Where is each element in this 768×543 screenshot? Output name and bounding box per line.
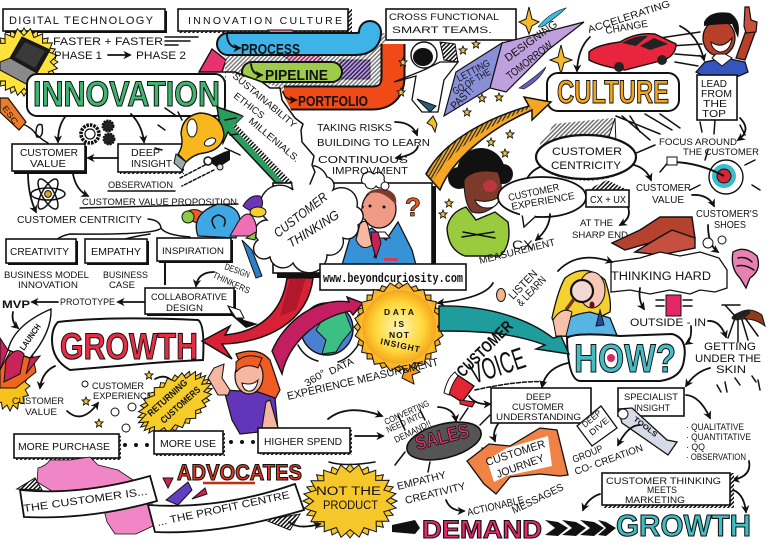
box: digital technology: DIGITAL TECHNOLOGY (9, 15, 154, 27)
text: 360 degree data: 360° (303, 368, 328, 390)
icon: mosquito (722, 305, 765, 342)
text: at the sharp end: SHARP END (572, 230, 628, 241)
ellipse: sales: SALES (413, 420, 472, 455)
text: accelerating change: ACCELERATING (587, 0, 672, 36)
text: design thinkers: THINKERS (211, 270, 252, 296)
box: website url (320, 264, 466, 290)
text: customer centricity (17, 214, 190, 241)
box: higher spend: HIGHER SPEND (264, 436, 342, 448)
text: taking risks, building to learn, continuous improvment: TAKING RISKS (317, 123, 392, 134)
box: more use: MORE USE (160, 438, 216, 450)
box: lead from the top: THE (703, 99, 727, 110)
text: business model innovation: INNOVATION (18, 280, 78, 291)
pipe decorations (199, 30, 385, 95)
box: customer value: CUSTOMER (20, 148, 78, 159)
text: focus around the customer: THE CUSTOMER (683, 147, 759, 158)
box: collaborative design (145, 288, 236, 316)
box: customer value: VALUE (30, 159, 66, 170)
icon: astronaut (394, 42, 458, 112)
text: at the sharp end (572, 207, 629, 241)
box: creativity (6, 239, 78, 265)
icon: launch rocket: LAUNCH (17, 322, 43, 352)
arrow: teal to how (439, 306, 569, 354)
heading: growth (red) (52, 318, 203, 370)
text: actionable messages: MESSAGES (510, 481, 566, 517)
card: deep dive (577, 406, 617, 446)
banner: letting go of the past, designing tomorrow: PAST! (449, 85, 476, 112)
diagram: process pipeline portfolio pipes (199, 30, 393, 110)
process pipe: PROCESS (241, 41, 300, 58)
cloud: customer thinking: CUSTOMER (271, 189, 330, 240)
character: blonde woman with magnifying glass (552, 270, 618, 338)
icon: snail (182, 196, 266, 240)
box: specialist insight: SPECIALIST (624, 392, 678, 403)
text: observation: OBSERVATION (108, 180, 173, 191)
process pipe (227, 32, 370, 58)
text: business model innovation: BUSINESS MODEL (4, 270, 89, 281)
arrow: orange to culture (426, 97, 551, 190)
box: customer thinking meets marketing (583, 473, 746, 512)
text: prototype and mvp: PROTOTYPE (60, 297, 115, 308)
text: 360 degree data (303, 356, 356, 390)
thought cloud: thinking hard (558, 225, 727, 294)
card: deep dive: DEEP (580, 408, 603, 430)
character: smiling man with arms crossed (447, 148, 513, 256)
text: customer value, customer's shoes: SHOES (714, 220, 746, 231)
text: taking risks, building to learn, continuous improvment: CONTINUOUS (318, 155, 408, 166)
heading: growth (teal): GROWTH (616, 508, 751, 543)
text: customer centricity: CUSTOMER CENTRICITY (17, 214, 142, 226)
text: accelerating change: CHANGE (605, 19, 649, 37)
text: research methods list: · OBSERVATION (686, 452, 746, 462)
text: design thinkers: DESIGN (223, 261, 251, 280)
box: cx plus ux: CX + UX (590, 195, 626, 206)
text: group co-creation: GROUP (571, 443, 605, 466)
text: customer value and experience under growth: EXPERIENCE (93, 391, 153, 402)
text: customer value, customer's shoes: CUSTOMER (636, 183, 691, 194)
starburst: data is not insight: NOT (389, 330, 410, 340)
icon: target (660, 150, 760, 194)
text: outside-in: OUTSIDE - IN (630, 317, 706, 329)
box: more use (154, 431, 225, 456)
box: empathy (85, 239, 149, 265)
text: customer value proposition: CUSTOMER VALUE PROPOSITION (82, 197, 237, 208)
banner: letting go of the past, designing tomorrow (444, 7, 584, 116)
icon: pointing hand (228, 306, 258, 328)
thought cloud: thinking hard: THINKING HARD (611, 271, 711, 283)
text: taking risks, building to learn, continuous improvment: BUILDING TO LEARN (317, 138, 430, 149)
ellipse: sales (395, 408, 492, 472)
icon: red shoes (612, 217, 695, 255)
box: higher spend (258, 428, 352, 455)
icon: binoculars (180, 150, 230, 186)
starburst: data is not insight: IS (394, 319, 404, 329)
text: actionable messages: ACTIONABLE (466, 494, 525, 519)
icon: hand with eye, listen and learn: & LEARN (515, 274, 549, 309)
cloud: pink behind banner (37, 457, 153, 534)
box: customer thinking meets marketing: MEETS (647, 485, 677, 496)
text: customer value and experience under growth: VALUE (25, 407, 57, 418)
cloud: customer thinking: THINKING (285, 207, 342, 251)
arrow: red to growth (202, 278, 313, 359)
arrow: green to innovation (217, 107, 293, 183)
box: collaborative design: COLLABORATIVE (151, 292, 227, 303)
arrow: crimson arc around globe (272, 297, 363, 374)
portfolio pipe: PORTFOLIO (298, 93, 368, 110)
banner: the customer is (17, 476, 157, 517)
text: getting under the skin (686, 341, 761, 392)
icon: globe (298, 303, 360, 362)
text: prototype and mvp (2, 297, 144, 328)
icon: esc price tag: ESC (0, 104, 20, 127)
box: more purchase (14, 434, 121, 460)
icon: customer voice megaphone: VOICE (466, 342, 529, 391)
icon: tools wrench: TOOLS (632, 416, 658, 439)
bubble: customer centricity: CUSTOMER (552, 146, 622, 158)
heading: innovation: INNOVATION (33, 75, 220, 114)
box: deep insight (88, 114, 184, 174)
text: group co-creation: CO- CREATION (573, 443, 645, 478)
banner: letting go of the past, designing tomorrow: LETTING (455, 58, 492, 85)
text: business case: BUSINESS (103, 270, 148, 281)
text: cx measurement: MEASUREMENT (478, 237, 556, 267)
pipeline pipe: PIPELINE (265, 67, 328, 84)
box: digital technology (3, 9, 167, 33)
text: faster and faster, phase 1 to phase 2: PHASE 2 (136, 50, 186, 62)
text: cx measurement (478, 214, 556, 267)
icon: brain (732, 249, 758, 288)
text: taking risks, building to learn, continuous improvment: IMPROVMENT (332, 166, 408, 177)
starburst: data is not insight: DATA (384, 307, 414, 317)
text: research methods list: · QUALITATIVE (686, 422, 744, 432)
text: business case: CASE (109, 280, 135, 291)
text: cx measurement: CX (512, 238, 533, 252)
text: outside-in (630, 317, 726, 344)
bubble: customer centricity: CENTRICITY (551, 160, 622, 172)
heading: how (542, 334, 685, 387)
icon: tools wrench (618, 408, 677, 455)
starburst: returning customers (126, 358, 224, 448)
text: faster and faster, phase 1 to phase 2 (53, 36, 198, 62)
icon: laptop with burst (0, 22, 64, 102)
arrow: url to data star (438, 283, 493, 303)
text: focus around the customer: FOCUS AROUND (659, 137, 737, 148)
heading: how: HOW? (574, 337, 676, 381)
dots between boxes (123, 440, 255, 447)
box: more purchase: MORE PURCHASE (18, 441, 110, 453)
box: innovation culture (178, 9, 352, 33)
box: deep customer understanding: DEEP (526, 392, 551, 403)
text: getting under the skin: UNDER THE (695, 353, 761, 365)
starburst: returning customers: RETURNING (146, 378, 190, 419)
heading: culture: CULTURE (557, 74, 669, 110)
starburst: data is not insight (346, 274, 452, 384)
panel: central customer thinking (273, 172, 436, 278)
icon: customer voice megaphone: CUSTOMER (454, 318, 517, 381)
cloud with sustainability, ethics, millenials: ETHICS (231, 91, 266, 122)
text: customer value and experience under growth (12, 366, 175, 432)
card: deep dive: DIVE (587, 415, 611, 438)
box: deep insight: INSIGHT (131, 159, 172, 170)
text: customer value, customer's shoes (636, 183, 758, 231)
bubble: customer experience (498, 177, 586, 227)
starburst: not the product (289, 458, 405, 543)
box: lead from the top (697, 74, 737, 120)
icon: customer voice megaphone (444, 318, 545, 407)
text: prototype and mvp: MVP (2, 299, 30, 311)
icon: hand with eye, listen and learn: LISTEN (507, 268, 540, 302)
box: inspiration: INSPIRATION (162, 246, 224, 257)
box: deep insight: DEEP (131, 148, 160, 159)
box: deep customer understanding (491, 388, 591, 441)
box: cross functional smart teams: CROSS FUNCTIONAL (389, 12, 499, 23)
text: focus around the customer (616, 114, 759, 160)
box: deep customer understanding: UNDERSTANDING (496, 412, 581, 423)
text: faster and faster, phase 1 to phase 2: FASTER + FASTER (53, 36, 163, 48)
icon: esc price tag (0, 98, 48, 143)
box: deep customer understanding: CUSTOMER (512, 402, 564, 413)
box: creativity: CREATIVITY (10, 247, 69, 258)
box: cross functional smart teams: SMART TEAMS. (392, 25, 492, 36)
text: design thinkers (196, 261, 252, 296)
icon: door (640, 288, 692, 316)
bubble: customer experience: CUSTOMER (507, 182, 560, 204)
box: customer thinking meets marketing: CUSTOMER THINKING (606, 476, 721, 487)
text: converting need into demand: NEED INTO (385, 409, 425, 435)
arrows: chevrons to demand and growth (392, 520, 616, 536)
decorative stars (397, 40, 514, 218)
box: empathy: EMPATHY (91, 247, 141, 258)
text: customer value and experience under growth: CUSTOMER (12, 396, 64, 407)
icon: pen (165, 240, 262, 285)
character: red-haired woman thumbs up (208, 351, 280, 434)
icon: question mark: ? (405, 192, 421, 222)
icon: gears (81, 120, 114, 144)
text: customer value and experience under growth: CUSTOMER (92, 381, 144, 392)
shape: customer journey (467, 428, 568, 494)
text: advocates (163, 460, 302, 505)
text: accelerating change (577, 0, 704, 71)
text: actionable messages (466, 481, 566, 519)
text: business case (103, 270, 148, 291)
character: lead from the top man (696, 7, 757, 80)
box: innovation culture: INNOVATION CULTURE (188, 15, 342, 27)
box: lead from the top: LEAD (701, 79, 727, 90)
text: empathy and creativity: EMPATHY (396, 469, 447, 493)
text: experience measurement: EXPERIENCE MEASUREMENT (286, 356, 440, 403)
starburst: returning customers: CUSTOMERS (159, 385, 203, 426)
text: converting need into demand: DEMAND!! (392, 418, 433, 445)
text: getting under the skin: GETTING (704, 341, 756, 353)
cloud: customer thinking (254, 165, 363, 273)
box: collaborative design: DESIGN (166, 303, 203, 314)
box: lead from the top: TOP (702, 109, 726, 120)
box: cx plus ux (586, 180, 629, 207)
text: advocates: ADVOCATES (177, 460, 302, 485)
small thought puffs (361, 172, 389, 190)
box: lead from the top: FROM (701, 89, 732, 100)
text: customer value, customer's shoes: CUSTOMER'S (696, 209, 758, 220)
text: converting need into demand (328, 398, 456, 464)
text: getting under the skin: SKIN (716, 364, 746, 376)
banner: the profit centre: ... THE PROFIT CENTRE (156, 489, 291, 529)
portfolio pipe (283, 44, 393, 110)
icon: light bulb (155, 108, 240, 170)
text: converting need into demand: CONVERTING (383, 398, 431, 427)
banner: letting go of the past, designing tomorrow: GO OF THE (451, 67, 493, 98)
starburst: not the product: PRODUCT (323, 500, 378, 512)
bubble: customer centricity (524, 118, 651, 186)
pipeline pipe (251, 64, 332, 84)
banner: letting go of the past, designing tomorrow: DESIGNING (503, 18, 560, 64)
box: specialist insight: INSIGHT (634, 403, 670, 414)
box: specialist insight (618, 388, 710, 418)
shape: customer journey: CUSTOMER (484, 438, 547, 469)
heading: growth (red): GROWTH (60, 326, 198, 367)
text: at the sharp end: AT THE (580, 218, 613, 229)
cloud with sustainability, ethics, millenials (223, 71, 315, 184)
box: customer thinking meets marketing: MARKETING (625, 495, 685, 506)
box: customer value (12, 117, 88, 212)
text: customer value, customer's shoes: VALUE (652, 195, 684, 206)
icon: launch rocket (0, 309, 51, 411)
text: faster and faster, phase 1 to phase 2: PHASE 1 (54, 50, 102, 62)
text: research methods list: · QQ (686, 442, 705, 452)
shape: customer journey: JOURNEY (495, 452, 547, 481)
text: research methods list (686, 422, 751, 480)
text: research methods list: · QUANTITATIVE (686, 432, 751, 442)
icon: atom (31, 176, 65, 212)
icon: red sports car (589, 32, 702, 72)
box: cross functional smart teams (386, 9, 516, 40)
text: empathy and creativity: CREATIVITY (404, 480, 467, 507)
icon: thinking man (342, 189, 416, 265)
bubble: customer experience: EXPERIENCE (511, 191, 576, 213)
text: taking risks, building to learn, continuous improvment (317, 122, 430, 177)
box: inspiration (157, 238, 233, 263)
box: website url: www.beyondcuriosity.com (323, 271, 463, 286)
icon: hand with eye, listen and learn (496, 268, 549, 309)
text: business model innovation (4, 270, 89, 291)
text: empathy and creativity (396, 469, 467, 511)
banner: the customer is: THE CUSTOMER IS... (23, 486, 148, 515)
banner: the profit centre (148, 484, 304, 532)
text: 360 degree data: DATA (327, 356, 356, 378)
cloud with sustainability, ethics, millenials: SUSTAINABILITY (230, 71, 299, 131)
starburst: not the product: NOT THE (316, 486, 381, 498)
starburst: data is not insight: INSIGHT (380, 336, 422, 354)
cloud with sustainability, ethics, millenials: MILLENIALS. (246, 116, 301, 165)
banner: letting go of the past, designing tomorrow: TOMORROW (504, 39, 556, 82)
